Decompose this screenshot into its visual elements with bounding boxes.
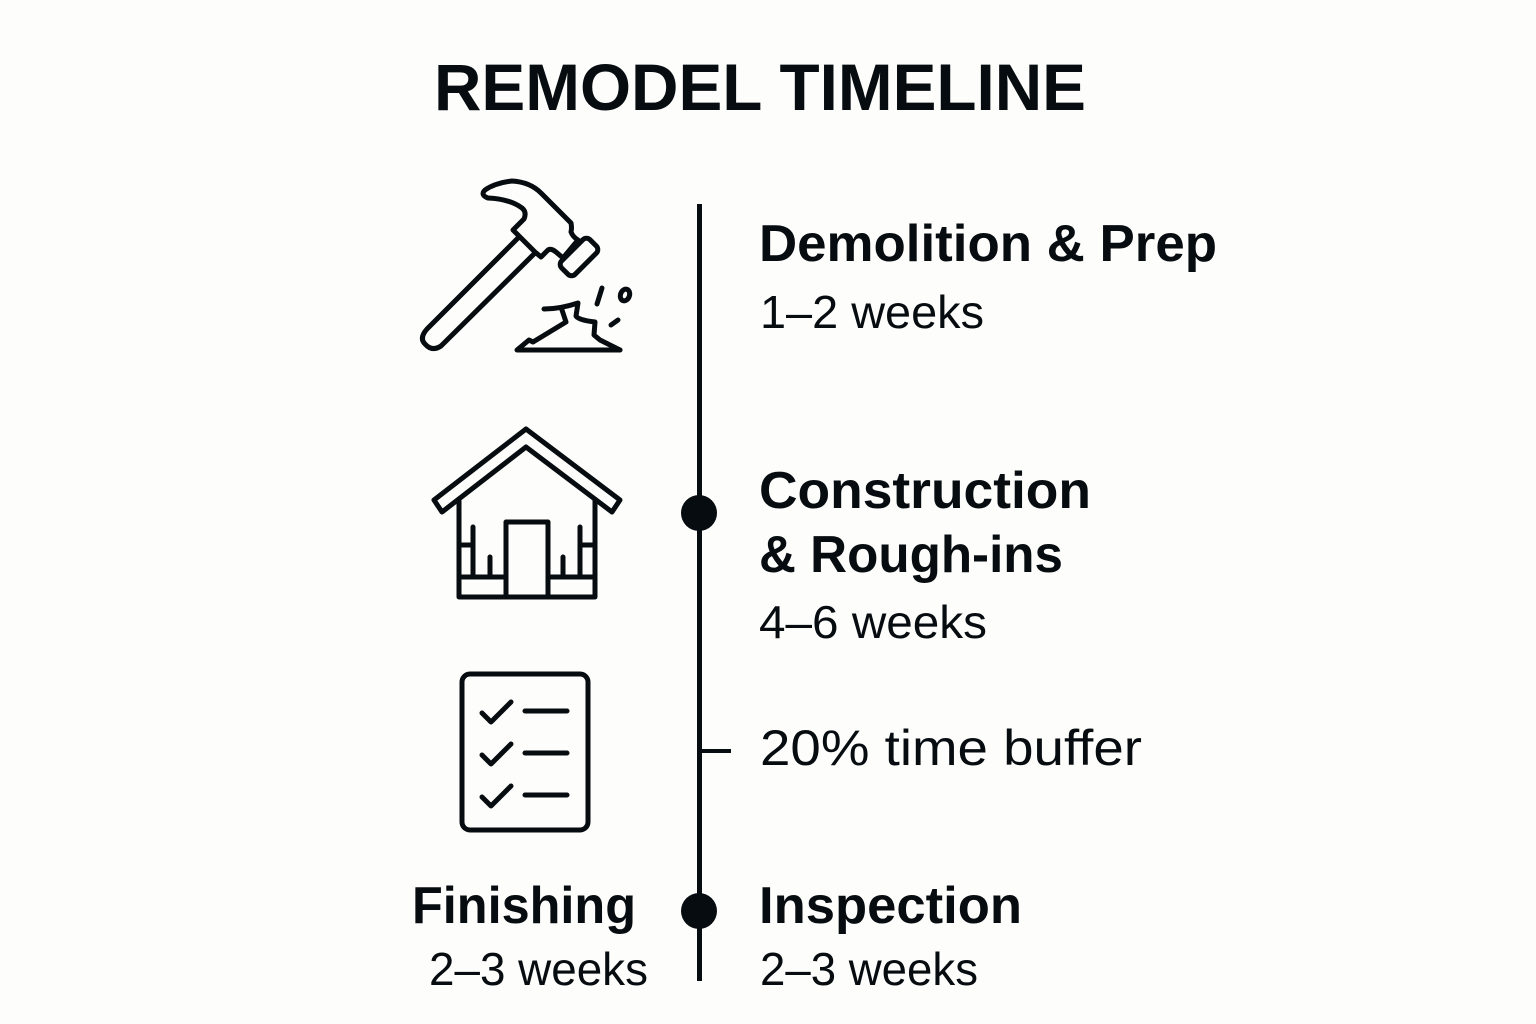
icon: checklist xyxy=(462,674,588,830)
step: inspection: Inspection xyxy=(759,877,1022,935)
clipboard xyxy=(462,674,588,830)
icon: house under construction xyxy=(434,429,620,597)
step: demolition and prep xyxy=(759,215,1217,338)
rubble xyxy=(517,303,620,350)
milestone dot: construction xyxy=(681,495,717,531)
timeline axis xyxy=(681,204,731,981)
step: construction and rough-ins: 4–6 weeks xyxy=(759,596,987,648)
hammer face xyxy=(558,236,600,278)
step: finishing: 2–3 weeks xyxy=(429,943,648,995)
step: inspection xyxy=(759,877,1022,995)
hammer head xyxy=(483,181,578,258)
step: inspection: 2–3 weeks xyxy=(760,943,978,995)
debris xyxy=(597,288,618,325)
step: construction and rough-ins: & Rough-ins xyxy=(759,526,1063,584)
hammer handle xyxy=(422,238,535,349)
icon: hammer and rubble xyxy=(422,181,631,350)
step: finishing xyxy=(412,877,648,995)
step: construction and rough-ins xyxy=(759,462,1091,648)
studs xyxy=(460,527,594,576)
door xyxy=(506,522,548,597)
title: REMODEL TIMELINE xyxy=(434,50,1086,124)
step: demolition and prep: 1–2 weeks xyxy=(760,286,984,338)
buffer tick xyxy=(699,749,731,753)
check items xyxy=(482,702,567,806)
step: finishing: Finishing xyxy=(412,877,636,935)
walls and floor xyxy=(459,501,595,597)
buffer note: 20% time buffer xyxy=(760,720,1142,776)
step: construction and rough-ins: Construction xyxy=(759,462,1091,520)
step: demolition and prep: Demolition & Prep xyxy=(759,215,1217,273)
roof xyxy=(434,429,620,512)
milestone dot: inspection xyxy=(681,893,717,929)
